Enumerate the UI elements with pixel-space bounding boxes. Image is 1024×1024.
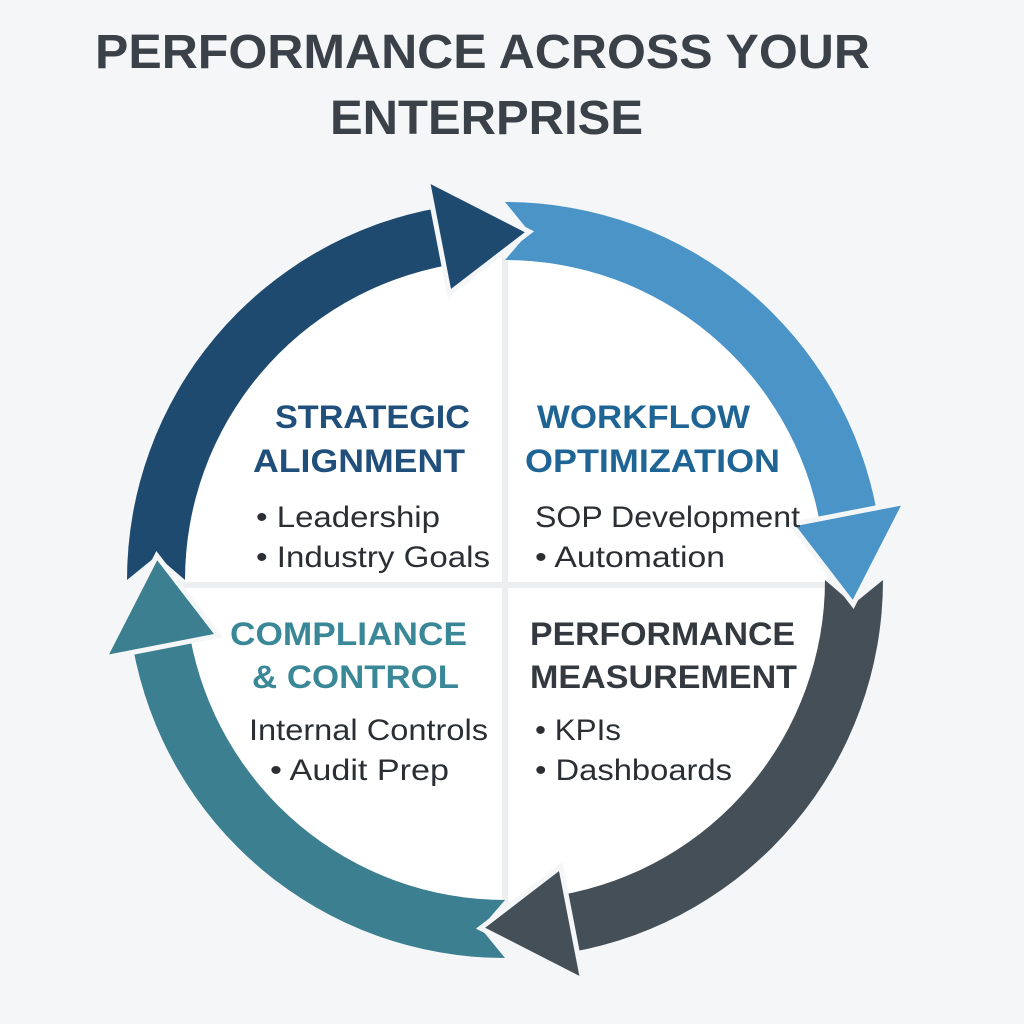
quadrant: performance measurement: • Dashboards: [535, 754, 732, 787]
quadrant: workflow optimization: OPTIMIZATION: [525, 443, 780, 479]
quadrant: compliance & control: COMPLIANCE: [230, 616, 467, 652]
quadrant: compliance & control: [230, 616, 488, 787]
quadrant: strategic alignment: • Leadership: [256, 501, 440, 534]
quadrant: performance measurement: [530, 616, 797, 787]
quadrant: compliance & control: • Audit Prep: [270, 754, 449, 787]
quadrant: workflow optimization: • Automation: [535, 541, 725, 574]
quadrant: strategic alignment: • Industry Goals: [256, 541, 490, 574]
quadrant: strategic alignment: [253, 399, 490, 574]
quadrant: performance measurement: • KPIs: [535, 714, 621, 747]
inner circle: [183, 258, 827, 902]
quadrant: workflow optimization: WORKFLOW: [537, 399, 751, 435]
quadrant: performance measurement: PERFORMANCE: [530, 616, 795, 652]
arrowhead: navy: [427, 180, 529, 293]
quadrant: strategic alignment: ALIGNMENT: [253, 443, 466, 479]
arrowhead: light blue: [792, 502, 906, 604]
title: [95, 26, 870, 145]
title: ENTERPRISE: [330, 92, 643, 145]
arrowhead: teal: [104, 556, 218, 658]
title: PERFORMANCE ACROSS YOUR: [95, 26, 870, 79]
quadrant: workflow optimization: SOP Development: [535, 501, 801, 534]
arrow body: performance (gray): [561, 580, 883, 952]
arrow body: strategic (navy): [127, 208, 449, 580]
quadrant: performance measurement: MEASUREMENT: [530, 659, 797, 695]
arrowhead: gray: [481, 867, 583, 980]
quadrant: compliance & control: & CONTROL: [252, 659, 459, 695]
cycle arrows: [104, 180, 906, 980]
quadrant: compliance & control: Internal Controls: [249, 714, 488, 747]
quadrant: workflow optimization: [525, 399, 801, 574]
arrow body: workflow (light blue): [505, 202, 877, 524]
quadrant: strategic alignment: STRATEGIC: [275, 399, 470, 435]
arrow body: compliance (teal): [133, 636, 505, 958]
